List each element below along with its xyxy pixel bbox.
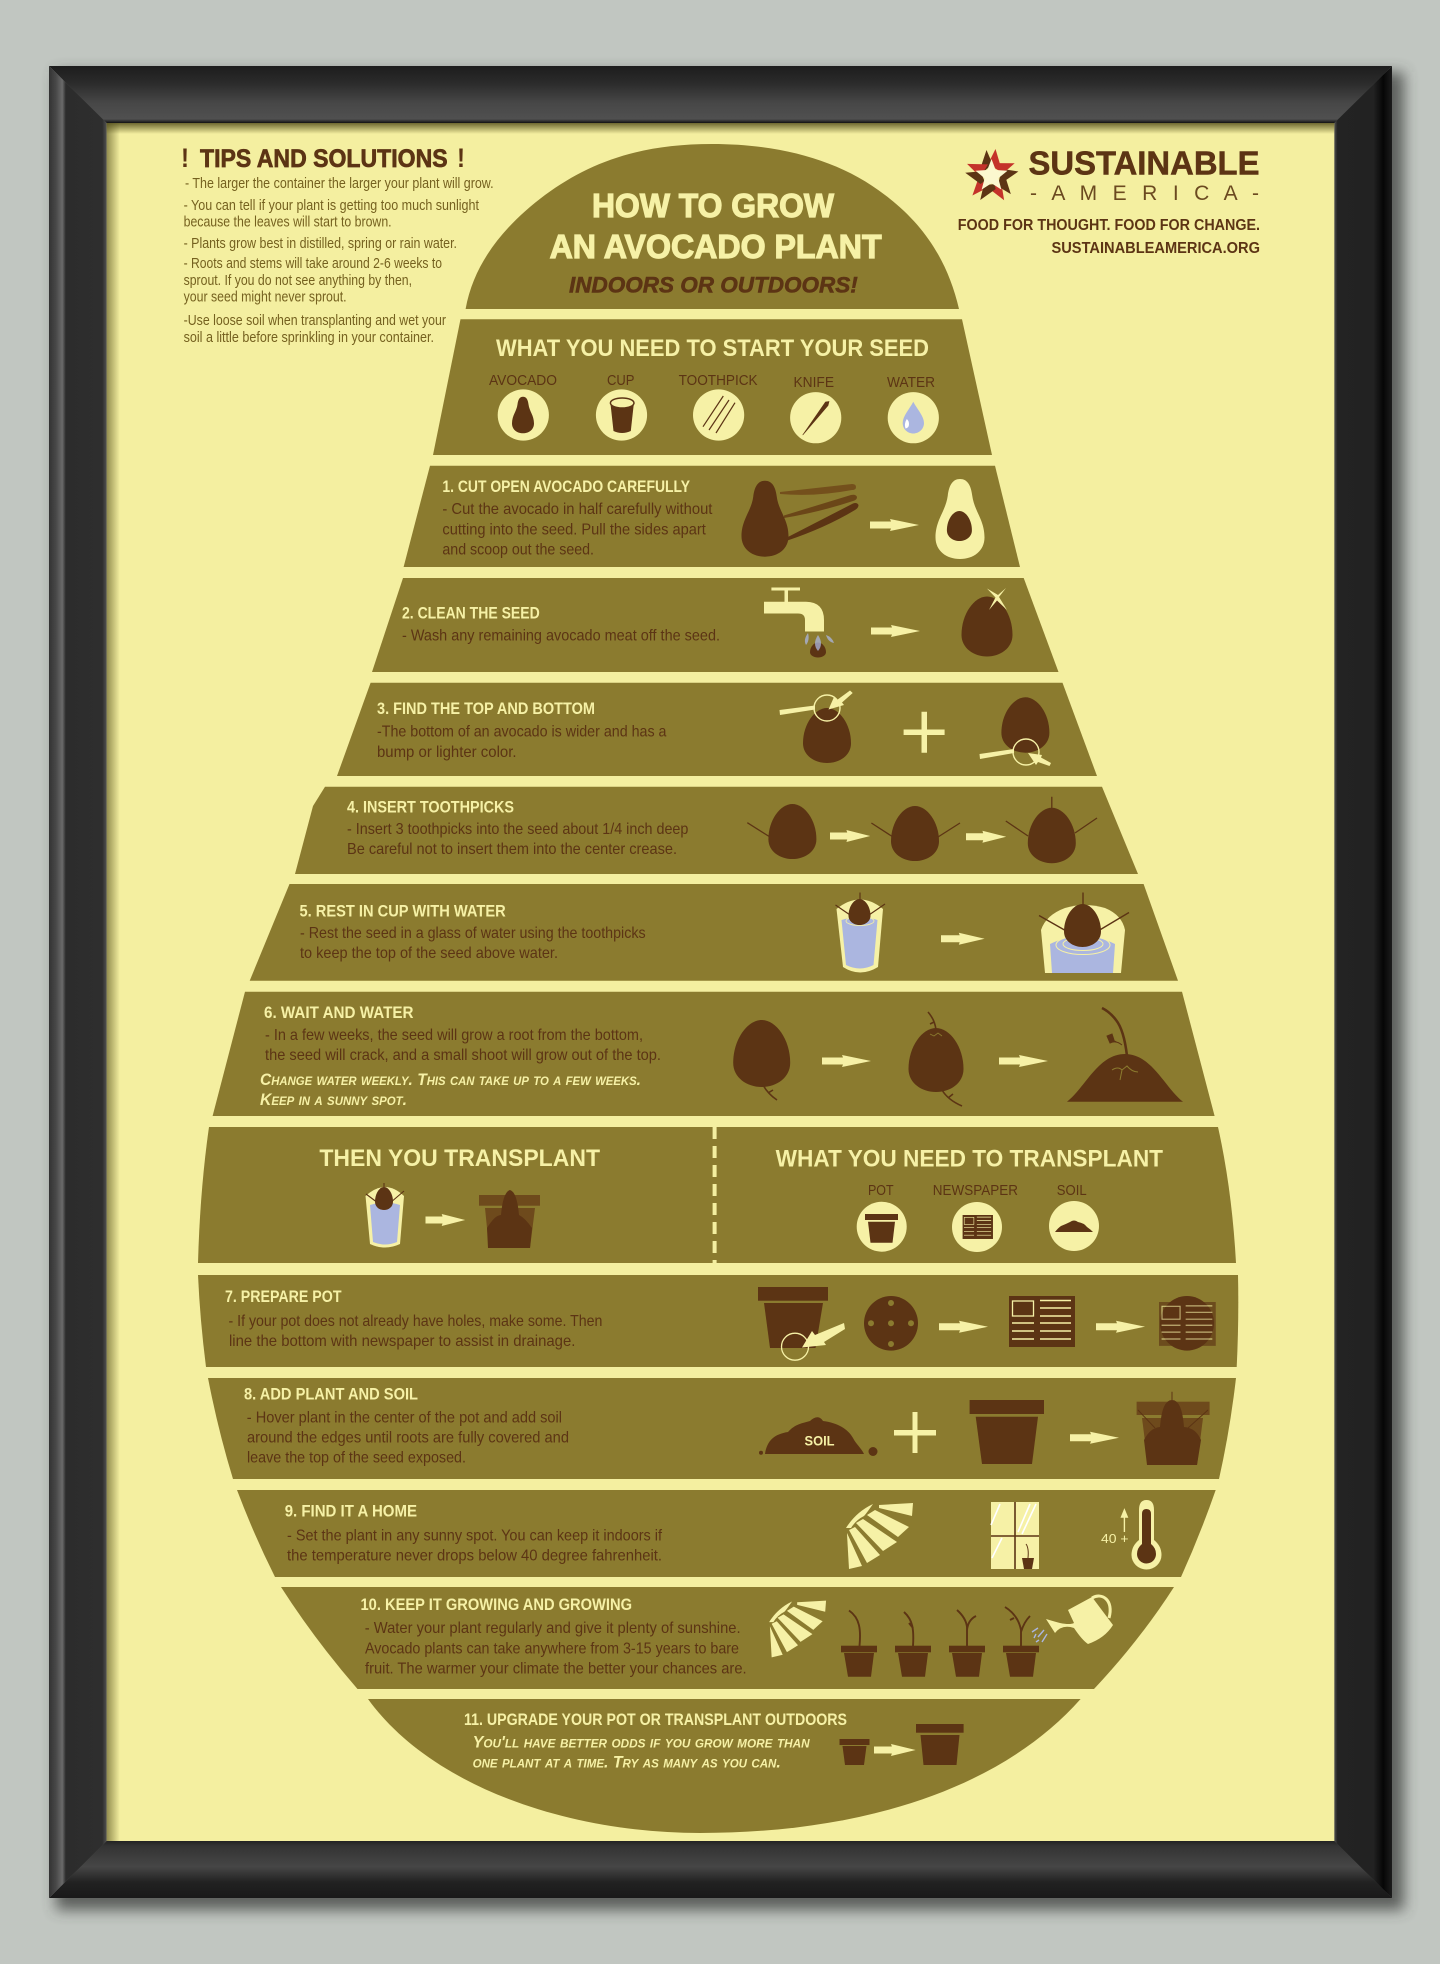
- icon: pot bottom with holes: [864, 1296, 918, 1351]
- panel: step 1: [404, 466, 1020, 567]
- step 10 text: Avocado plants can take anywhere from 3-15 years to bare: [365, 1641, 739, 1658]
- item: water: [887, 375, 939, 443]
- icon: close-up seed in water: [1039, 892, 1129, 973]
- tips heading: TIPS AND SOLUTIONS: [200, 145, 448, 173]
- item: soil: SOIL: [1057, 1183, 1087, 1199]
- step 10 text: 10. KEEP IT GROWING AND GROWING: [360, 1596, 632, 1614]
- step 5 text: 5. REST IN CUP WITH WATER: [300, 903, 506, 921]
- step 7 text: line the bottom with newspaper to assist in drainage.: [229, 1333, 575, 1350]
- arrow: [999, 1055, 1048, 1067]
- icon: four growing plants in pots: [841, 1607, 1039, 1677]
- step 11 text: [464, 1711, 847, 1772]
- step 11 text: 11. UPGRADE YOUR POT OR TRANSPLANT OUTDOORS: [464, 1711, 847, 1729]
- arrow: [870, 519, 919, 531]
- step 1 text: - Cut the avocado in half carefully without: [442, 501, 713, 518]
- step 8 text: around the edges until roots are fully covered and: [247, 1430, 569, 1447]
- icon: avocado with skin peeled: [742, 481, 858, 557]
- icon: thermometer: [1101, 1500, 1162, 1570]
- step 1 text: 1. CUT OPEN AVOCADO CAREFULLY: [442, 478, 690, 496]
- icon: seed with root: [733, 1020, 790, 1100]
- icon: pot: [970, 1400, 1044, 1464]
- icon: newspaper: [1009, 1296, 1075, 1347]
- step 10 text: fruit. The warmer your climate the better your chances are.: [365, 1661, 747, 1678]
- title: INDOORS OR OUTDOORS!: [569, 273, 858, 298]
- icon: soil: [759, 1417, 878, 1456]
- step 9 text: - Set the plant in any sunny spot. You can keep it indoors if: [287, 1528, 662, 1545]
- step 1 text: cutting into the seed. Pull the sides apart: [442, 522, 706, 539]
- title: [550, 187, 882, 298]
- tips list: - Plants grow best in distilled, spring or rain water.: [184, 235, 457, 252]
- icon: plant in pot: [1137, 1392, 1210, 1465]
- item: toothpick: [679, 373, 758, 441]
- panel: step 2: [372, 578, 1058, 672]
- tips list: - The larger the container the larger your plant will grow.: [185, 175, 494, 192]
- step 10 text: - Water your plant regularly and give it plenty of sunshine.: [365, 1620, 741, 1637]
- item: avocado: [489, 373, 557, 441]
- step 2 text: 2. CLEAN THE SEED: [402, 604, 540, 622]
- tips list: soil a little before sprinkling in your container.: [184, 329, 434, 346]
- heading: what you need to transplant: WHAT YOU NEED TO TRANSPLANT: [776, 1146, 1163, 1173]
- arrow: [426, 1214, 465, 1226]
- panel: step 11: [368, 1699, 1081, 1833]
- arrow: [822, 1055, 871, 1067]
- item: cup: [596, 373, 647, 441]
- panel: step 8: [208, 1378, 1236, 1479]
- icon: seed with two toothpicks: [871, 806, 960, 861]
- item: newspaper: [933, 1183, 1018, 1252]
- step 6 text: - In a few weeks, the seed will grow a root from the bottom,: [265, 1027, 643, 1044]
- tips heading: !: [457, 143, 465, 173]
- step 3 text: 3. FIND THE TOP AND BOTTOM: [377, 700, 595, 718]
- step 10 text: [360, 1596, 747, 1678]
- icon: faucet: [764, 588, 834, 658]
- icon: sun: [846, 1503, 913, 1569]
- panel: step 4: [295, 787, 1138, 874]
- step 2 text: [402, 604, 720, 645]
- step 6 text: 6. WAIT AND WATER: [264, 1004, 414, 1022]
- tips list: your seed might never sprout.: [184, 289, 347, 306]
- arrow: [939, 1321, 988, 1333]
- step 4 text: Be careful not to insert them into the center crease.: [347, 841, 677, 858]
- tips list: -Use loose soil when transplanting and wet your: [184, 312, 446, 329]
- icon: small pot: [840, 1739, 870, 1765]
- step 8 text: - Hover plant in the center of the pot and add soil: [247, 1410, 562, 1427]
- step 7 text: 7. PREPARE POT: [225, 1288, 342, 1306]
- step 8 text: 8. ADD PLANT AND SOIL: [244, 1385, 418, 1403]
- step 6 text: Keep in a sunny spot.: [260, 1091, 407, 1109]
- panel: transplant: [198, 1127, 1236, 1263]
- arrow: [871, 625, 920, 637]
- step 2 text: - Wash any remaining avocado meat off the seed.: [402, 628, 720, 645]
- arrow: [874, 1744, 916, 1756]
- arrow: [966, 831, 1006, 843]
- step 6 text: the seed will crack, and a small shoot will grow out of the top.: [265, 1047, 661, 1064]
- tips list: - Roots and stems will take around 2-6 weeks to: [184, 255, 442, 272]
- step 3 text: -The bottom of an avocado is wider and has a: [377, 724, 667, 741]
- icon: sprout in soil mound: [1067, 1008, 1183, 1102]
- panel: tips and solutions: [181, 143, 494, 346]
- arrow: [1096, 1321, 1145, 1333]
- step 11 text: one plant at a time. Try as many as you can.: [473, 1754, 781, 1772]
- step 5 text: [300, 903, 646, 962]
- icon: seed in glass: [836, 892, 885, 972]
- item: soil: [1049, 1183, 1099, 1251]
- tips list: - You can tell if your plant is getting too much sunlight: [184, 197, 480, 214]
- step 1 text: and scoop out the seed.: [442, 542, 594, 559]
- arrow: [941, 933, 985, 945]
- item: knife: [790, 375, 841, 443]
- heading: then you transplant: THEN YOU TRANSPLANT: [319, 1145, 600, 1172]
- icon: pot with hole: [758, 1287, 845, 1360]
- step 3 text: [377, 700, 667, 761]
- item: water: WATER: [887, 375, 935, 391]
- title: AN AVOCADO PLANT: [550, 228, 882, 265]
- step 7 text: - If your pot does not already have holes, make some. Then: [228, 1313, 602, 1330]
- tips list: [184, 175, 494, 346]
- icon: pot with plant: [479, 1190, 540, 1248]
- icon: seed top with magnifier: [780, 690, 853, 763]
- logo: Sustainable America: SUSTAINABLEAMERICA.ORG: [1052, 240, 1260, 257]
- step 6 text: [260, 1004, 661, 1109]
- step 6 text: Change water weekly. This can take up to a few weeks.: [260, 1071, 641, 1089]
- icon: window with plant: [991, 1502, 1039, 1569]
- step 7 text: [225, 1288, 602, 1350]
- item: avocado: AVOCADO: [489, 373, 557, 389]
- step 11 text: You'll have better odds if you grow more than: [473, 1734, 810, 1752]
- step 8 text: leave the top of the seed exposed.: [247, 1450, 466, 1467]
- logo: Sustainable America: FOOD FOR THOUGHT. FOOD FOR CHANGE.: [958, 217, 1260, 234]
- panel: step 3: [337, 683, 1097, 776]
- panel: step 9: [237, 1490, 1216, 1577]
- step 9 text: 9. FIND IT A HOME: [285, 1503, 417, 1521]
- icon: thermometer: 40 +: [1101, 1531, 1128, 1546]
- icon: star: [962, 149, 1020, 204]
- icon: seed with one toothpick: [747, 804, 816, 859]
- step 9 text: the temperature never drops below 40 degree fahrenheit.: [287, 1548, 662, 1565]
- icon: soil: SOIL: [804, 1433, 835, 1449]
- panel: step 6: [213, 992, 1215, 1116]
- icon: cracked seed with shoot: [908, 1012, 964, 1106]
- step 4 text: 4. INSERT TOOTHPICKS: [347, 799, 514, 817]
- tips list: sprout. If you do not see anything by then,: [184, 272, 412, 289]
- poster background: [107, 123, 1334, 1841]
- panel: step 10: [281, 1587, 1174, 1689]
- panel: step 5: [250, 884, 1178, 981]
- item: pot: POT: [868, 1183, 894, 1199]
- icon: plus: [894, 1412, 936, 1453]
- panel: what you need to start your seed: [433, 319, 992, 455]
- icon: seed with three toothpicks: [1006, 797, 1097, 863]
- arrow: [1070, 1432, 1119, 1444]
- icon: opened avocado: [936, 479, 984, 559]
- logo: Sustainable America: SUSTAINABLE: [1028, 144, 1260, 181]
- title: HOW TO GROW: [592, 187, 835, 224]
- icon: glass with seed: [366, 1183, 404, 1248]
- icon: large pot: [916, 1724, 964, 1765]
- item: cup: CUP: [607, 373, 634, 389]
- icon: seed bottom with magnifier: [980, 697, 1051, 766]
- icon: clean seed: [962, 588, 1012, 656]
- item: newspaper: NEWSPAPER: [933, 1183, 1018, 1199]
- step 4 text: - Insert 3 toothpicks into the seed about 1/4 inch deep: [347, 821, 688, 838]
- item: knife: KNIFE: [794, 375, 834, 391]
- step 5 text: to keep the top of the seed above water.: [300, 945, 558, 962]
- icon: plus: [904, 712, 945, 753]
- item: pot: [857, 1183, 907, 1252]
- logo: Sustainable America: [958, 144, 1260, 257]
- step 1 text: [442, 478, 713, 559]
- step 5 text: - Rest the seed in a glass of water using the toothpicks: [300, 925, 646, 942]
- step 9 text: [285, 1503, 662, 1565]
- icon: sun: [769, 1601, 826, 1657]
- tips list: because the leaves will start to brown.: [184, 214, 392, 231]
- step 3 text: bump or lighter color.: [377, 744, 516, 761]
- step 8 text: [244, 1385, 569, 1467]
- icon: watering can: [1032, 1596, 1113, 1644]
- step 4 text: [347, 799, 688, 858]
- panel: title dome: [466, 144, 959, 309]
- arrow: [830, 830, 870, 842]
- icon: newspaper over pot bottom: [1159, 1296, 1216, 1351]
- item: toothpick: TOOTHPICK: [679, 373, 758, 389]
- logo: Sustainable America: - A M E R I C A -: [1030, 182, 1259, 205]
- tips heading: !: [181, 143, 189, 173]
- panel: step 7: [198, 1275, 1238, 1367]
- heading: WHAT YOU NEED TO START YOUR SEED: [496, 335, 929, 362]
